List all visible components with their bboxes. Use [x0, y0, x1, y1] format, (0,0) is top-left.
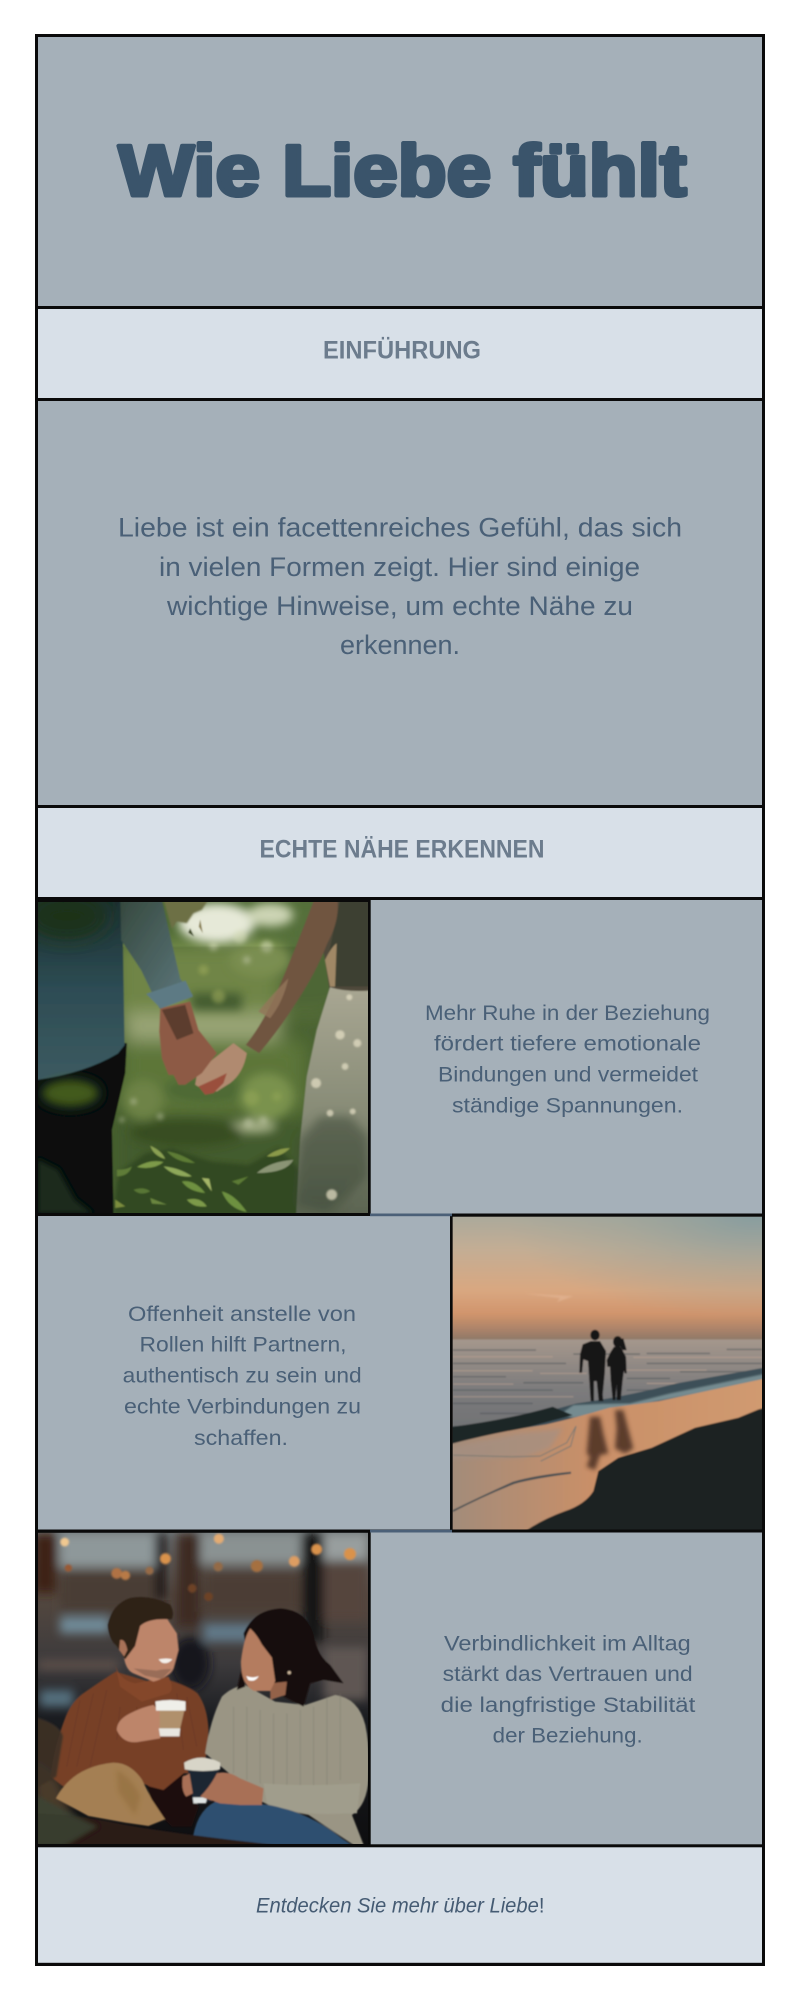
panel: introduction text: [38, 401, 762, 805]
sea: [447, 1339, 768, 1439]
photo: couple with coffee in a café: [38, 1532, 368, 1844]
wet sand: [447, 1378, 769, 1533]
text block: introduction: [118, 512, 682, 660]
man: shirt, sleeve and trousers: [27, 893, 193, 1216]
text block: introduction: in vielen Formen zeigt. Hier sind einige: [159, 552, 640, 582]
couple silhouette: [579, 1330, 627, 1401]
woman: arm and hand: [195, 900, 338, 1091]
foreground leaves: [112, 1146, 315, 1216]
text block: openness: echte Verbindungen zu: [124, 1395, 361, 1418]
text block: commitment: Verbindlichkeit im Alltag: [444, 1633, 691, 1656]
panel: commitment text cell: [371, 1532, 762, 1844]
divider line: navy top: [370, 1214, 452, 1216]
panel: footer: [38, 1847, 762, 1963]
dark dry sand: [522, 1403, 785, 1534]
text block: openness: [123, 1303, 362, 1450]
text block: introduction: erkennen.: [340, 630, 460, 660]
text block: commitment: [441, 1633, 695, 1748]
heading: Einführung: EINFÜHRUNG: [323, 336, 481, 364]
text block: calm: fördert tiefere emotionale: [434, 1033, 701, 1056]
text block: introduction: wichtige Hinweise, um echte Nähe zu: [166, 591, 633, 621]
panel: openness text cell: [38, 1216, 450, 1530]
leaves: top branch: [164, 900, 208, 937]
text block: calm: ständige Spannungen.: [452, 1095, 683, 1118]
divider line: navy bottom: [370, 1530, 452, 1532]
man: sweater, trousers and hair: [51, 1597, 209, 1827]
woman: dress and top: [295, 900, 370, 1215]
heading: Echte Nähe erkennen: ECHTE NÄHE ERKENNEN: [260, 836, 544, 864]
title: Wie Liebe fühlt: [118, 132, 687, 212]
panel: introduction heading: [38, 309, 762, 398]
wave foam: [447, 1367, 769, 1450]
panel: title: [38, 37, 762, 306]
couple reflection: [587, 1410, 633, 1470]
bokeh lights: [60, 1534, 356, 1601]
woman: sweater and jeans: [192, 1685, 369, 1845]
panel: recognising closeness heading: [38, 808, 762, 897]
table and foreground: [33, 1717, 292, 1847]
text block: commitment: stärkt das Vertrauen und: [443, 1663, 693, 1686]
photo: couple holding hands in a garden: [38, 902, 368, 1213]
footer call to action: Entdecken Sie mehr über Liebe!: [256, 1894, 544, 1917]
man: hand and cup: [117, 1700, 185, 1742]
photo: couple on a beach at sunset: [452, 1216, 762, 1530]
woman: face, hair and hand: [237, 1608, 344, 1707]
text block: calm: [425, 1002, 710, 1118]
text block: openness: Rollen hilft Partnern,: [140, 1334, 346, 1357]
text block: calm: Mehr Ruhe in der Beziehung: [425, 1002, 710, 1025]
text block: openness: Offenheit anstelle von: [128, 1303, 356, 1326]
text block: openness: authentisch zu sein und: [123, 1365, 362, 1388]
text block: commitment: der Beziehung.: [493, 1725, 643, 1748]
panel: calm text cell: [371, 900, 762, 1214]
text block: calm: Bindungen und vermeidet: [438, 1064, 698, 1087]
text block: commitment: die langfristige Stabilität: [441, 1694, 695, 1717]
text block: openness: schaffen.: [194, 1427, 288, 1450]
text block: introduction: Liebe ist ein facettenreiches Gefühl, das sich: [118, 512, 682, 542]
man: hand and forearm: [159, 1002, 227, 1095]
woman: cup and hand: [182, 1758, 264, 1805]
